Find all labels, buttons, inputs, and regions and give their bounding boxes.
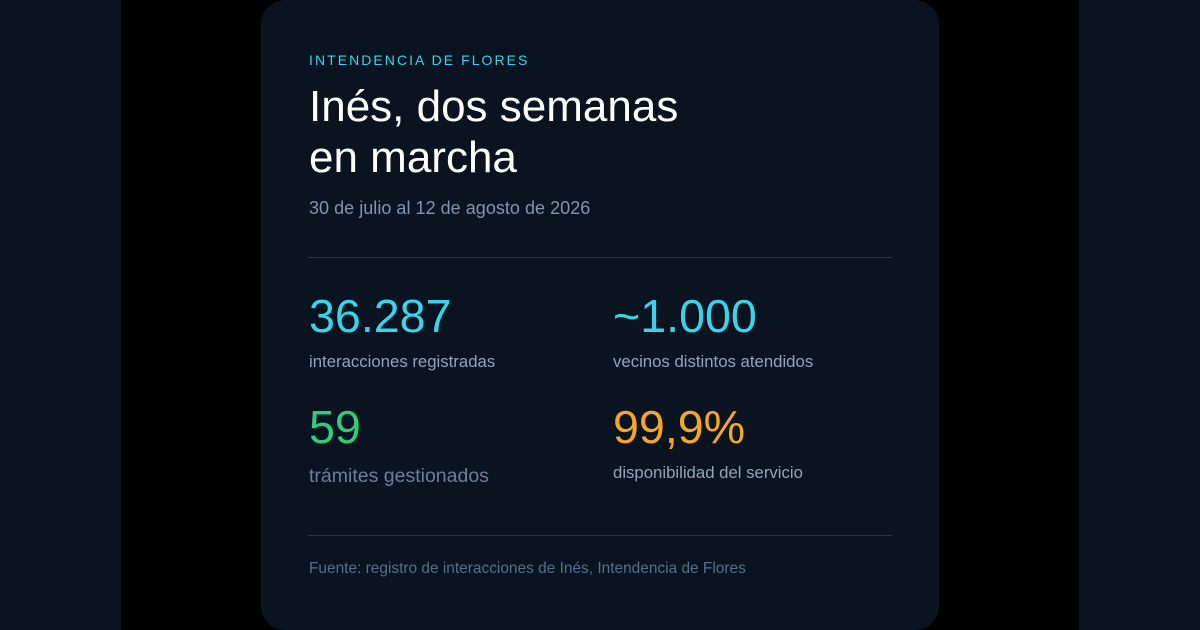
source note: Fuente: registro de interacciones de Inés, Intendencia de Flores — [309, 560, 746, 577]
value: 59: 59 — [309, 401, 361, 453]
title: en marcha — [309, 133, 517, 182]
panel: main card — [261, 0, 939, 630]
subtitle: dates: 30 de julio al 12 de agosto de 2026 — [309, 198, 590, 218]
title — [309, 82, 678, 182]
right background band — [1079, 0, 1200, 630]
label: availability: disponibilidad del servicio — [613, 463, 803, 482]
label: procedures: trámites gestionados — [309, 465, 489, 487]
label: interactions: interacciones registradas — [309, 352, 495, 371]
left background band — [0, 0, 121, 630]
metric: availability — [613, 401, 803, 482]
label: neighbours: vecinos distintos atendidos — [613, 352, 813, 371]
metric: neighbours — [613, 290, 813, 371]
metric: interactions — [309, 290, 495, 371]
eyebrow: organisation: INTENDENCIA DE FLORES — [309, 52, 529, 68]
value: ~1.000: ~1.000 — [613, 290, 757, 342]
value: 99,9%: 99,9% — [613, 401, 745, 453]
metric: procedures — [309, 401, 489, 487]
value: 36.287: 36.287 — [309, 290, 452, 342]
title: Inés, dos semanas — [309, 82, 678, 131]
